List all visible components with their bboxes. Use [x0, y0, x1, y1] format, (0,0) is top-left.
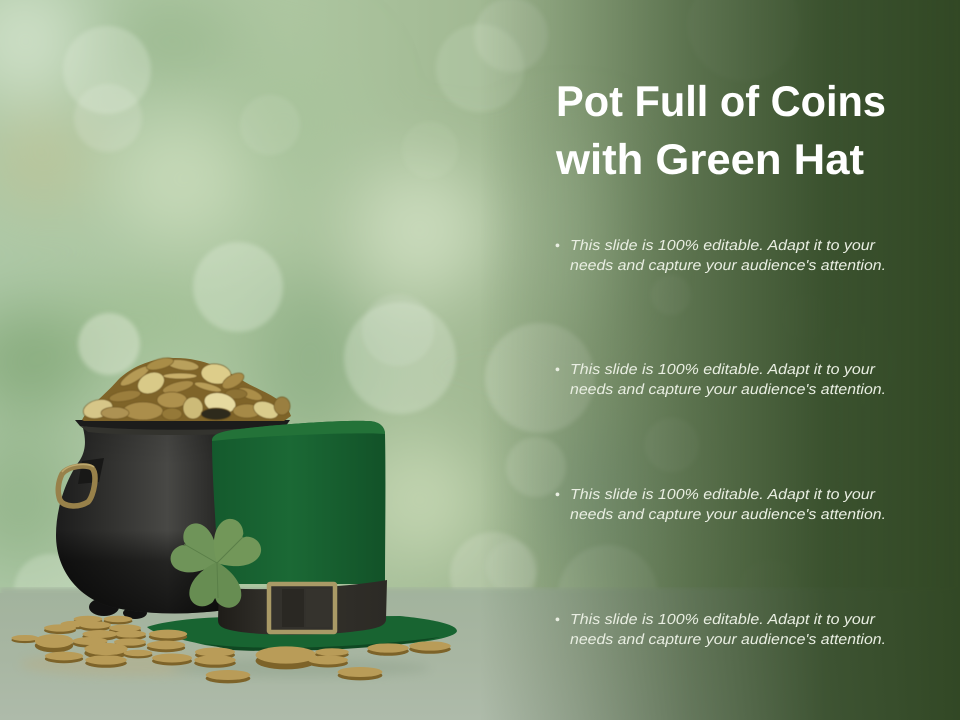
pot legs	[89, 598, 147, 619]
coin heap in the pot	[81, 356, 291, 422]
illustration: pot of coins and hat	[11, 356, 457, 683]
bullet list	[555, 237, 886, 648]
bullet 1: needs and capture your audience's attention.	[570, 258, 886, 274]
bullet 2: •	[555, 361, 560, 377]
icon: pot handle	[58, 458, 104, 506]
bullet 4: This slide is 100% editable. Adapt it to your	[570, 612, 876, 628]
icon: hat band	[218, 580, 387, 635]
title	[555, 78, 886, 184]
bullet 4: •	[555, 611, 560, 627]
bullet 3: This slide is 100% editable. Adapt it to your	[570, 487, 876, 503]
soft reflections on the floor	[20, 652, 430, 677]
bullet 1: This slide is 100% editable. Adapt it to your	[570, 238, 876, 254]
icon: buckle	[269, 584, 335, 632]
bullet 3: needs and capture your audience's attention.	[570, 507, 886, 523]
bullet 2	[555, 361, 886, 398]
bullet 4	[555, 611, 886, 648]
icon: shamrock	[166, 514, 266, 608]
floor coins	[11, 616, 451, 683]
title: Pot Full of Coins	[556, 78, 886, 126]
bullet 2: This slide is 100% editable. Adapt it to your	[570, 362, 876, 378]
icon: hat brim	[147, 616, 457, 651]
bullet 3	[555, 486, 886, 523]
bullet 3: •	[555, 486, 560, 502]
floor	[0, 593, 960, 720]
bullet 2: needs and capture your audience's attention.	[570, 382, 886, 398]
bullet 1: •	[555, 237, 560, 253]
bullet 1	[555, 237, 886, 274]
bullet 4: needs and capture your audience's attention.	[570, 632, 886, 648]
icon: black pot	[56, 420, 290, 613]
icon: hat crown	[212, 421, 385, 584]
title: with Green Hat	[555, 136, 864, 184]
